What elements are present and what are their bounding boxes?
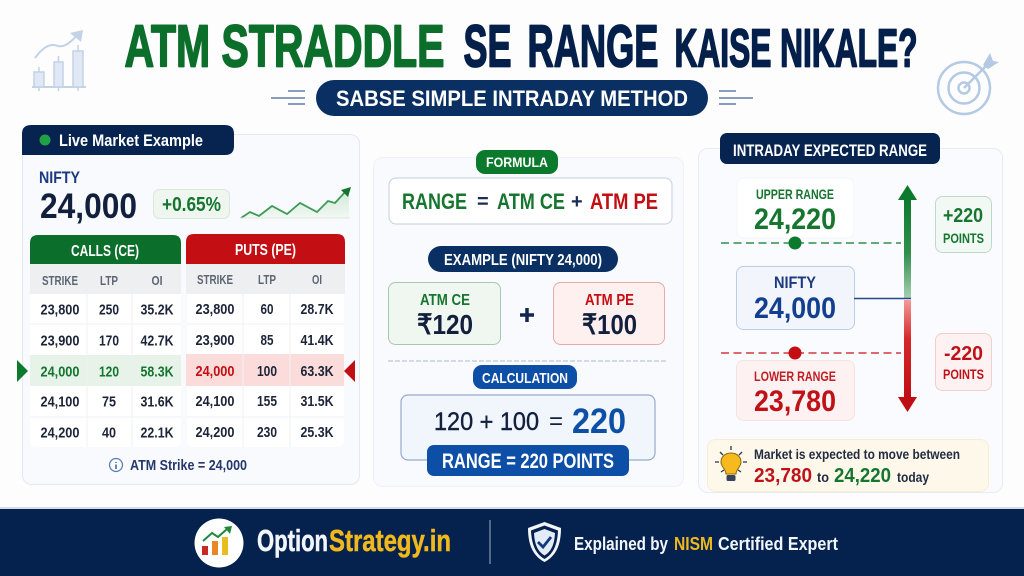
- callout: expected move: Market is expected to move between: [754, 446, 960, 462]
- header: live market example: Live Market Example: [59, 131, 203, 150]
- upper range level line: [721, 236, 901, 250]
- puts rows: 24,000: [196, 363, 234, 380]
- sparkline: [240, 187, 351, 218]
- calls rows: 40: [102, 424, 116, 442]
- formula pill: [476, 150, 558, 174]
- puts column headers: STRIKE: [197, 272, 233, 287]
- puts rows: 155: [257, 393, 277, 410]
- icon: candlestick growth chart: [32, 30, 86, 91]
- nifty card: 24,000: [754, 292, 836, 325]
- nifty card: NIFTY: [774, 273, 817, 292]
- range header: INTRADAY EXPECTED RANGE: [733, 141, 927, 160]
- footer bar: [0, 507, 1024, 576]
- marker: green ATM arrow: [17, 360, 28, 382]
- example pill: [428, 246, 618, 272]
- result pill: [427, 445, 629, 476]
- callout: expected move: to: [817, 469, 829, 485]
- ATM PE card: [554, 282, 664, 344]
- nifty value: 24,000: [40, 187, 137, 226]
- arrow: up green: [898, 185, 917, 298]
- calculation pill: CALCULATION: [482, 370, 568, 387]
- puts rows: 63.3K: [300, 363, 334, 380]
- title: RANGE: [528, 14, 658, 80]
- puts rows: 85: [260, 332, 274, 349]
- title: ATM STRADDLE: [124, 14, 444, 80]
- expert credit: Explained by: [574, 534, 668, 554]
- header: live market example: [22, 125, 234, 155]
- brand name: [257, 523, 451, 558]
- subtitle pill: SABSE SIMPLE INTRADAY METHOD: [336, 86, 688, 111]
- upper range card: UPPER RANGE: [756, 186, 834, 202]
- speed lines left: [271, 91, 305, 104]
- table: puts: [186, 234, 345, 447]
- panel: live market example: [17, 125, 360, 484]
- puts rows: 28.7K: [300, 301, 334, 318]
- calculation box: =: [549, 408, 563, 435]
- calls rows: 170: [99, 332, 119, 350]
- calculation pill: [473, 365, 577, 389]
- calls rows: 42.7K: [140, 332, 174, 350]
- lower range card: [736, 360, 854, 420]
- calculation box: 120 + 100: [434, 408, 539, 436]
- puts ATM highlight: [186, 354, 344, 386]
- puts rows: 23,900: [196, 332, 234, 349]
- formula pill: FORMULA: [486, 154, 548, 170]
- calls rows: 22.1K: [140, 424, 174, 442]
- -220 points badge: [936, 334, 992, 390]
- calls column headers: [30, 264, 181, 294]
- title: SE: [464, 14, 512, 80]
- puts rows: 24,100: [196, 393, 234, 410]
- upper range card: [737, 178, 854, 238]
- change badge: +0.65%: [162, 194, 221, 216]
- calls rows: 23,900: [40, 332, 80, 350]
- calls rows: 24,200: [40, 424, 80, 442]
- speed lines right: [719, 91, 753, 104]
- nifty card: [736, 266, 854, 330]
- +220 points badge: +220: [943, 205, 983, 227]
- expert credit: Certified Expert: [718, 534, 838, 554]
- callout: expected move: today: [897, 469, 929, 485]
- range header: [720, 133, 940, 164]
- calls rows: 35.2K: [140, 302, 174, 318]
- formula box: [389, 178, 672, 224]
- -220 points badge: -220: [944, 343, 983, 365]
- calls rows: 24,000: [40, 364, 80, 380]
- icon: shield check: [528, 522, 561, 562]
- subtitle pill: [316, 80, 708, 116]
- nifty label: NIFTY: [39, 168, 81, 187]
- puts rows: 23,800: [196, 301, 234, 318]
- lower range card: LOWER RANGE: [754, 368, 836, 384]
- panel: intraday expected range: [698, 133, 1002, 492]
- calls rows: 24,100: [40, 394, 80, 410]
- formula box: +: [571, 191, 583, 213]
- change badge: [154, 190, 230, 218]
- icon: logo: [194, 518, 244, 568]
- +220 points badge: POINTS: [943, 230, 984, 246]
- lower range card: 23,780: [754, 385, 836, 418]
- puts rows: 31.5K: [300, 393, 334, 410]
- ATM CE card: ATM CE: [420, 292, 470, 309]
- puts rows: 25.3K: [300, 424, 334, 441]
- formula box: ATM CE: [497, 189, 565, 214]
- icon: light bulb: [715, 446, 747, 481]
- calculation box: [401, 395, 655, 460]
- calls rows: 23,800: [40, 302, 80, 318]
- calculation box: 220: [572, 402, 626, 441]
- ATM strike note: ATM Strike = 24,000: [130, 458, 247, 474]
- calls rows: [40, 302, 174, 442]
- marker: red ATM arrow: [344, 360, 355, 382]
- ATM PE card: ATM PE: [585, 292, 634, 309]
- puts column headers: OI: [312, 272, 322, 287]
- puts column headers: LTP: [258, 272, 276, 287]
- calls rows: 75: [102, 394, 116, 410]
- arrow: down red: [898, 300, 917, 412]
- puts rows: 100: [257, 363, 277, 380]
- title: [124, 14, 918, 80]
- calls column headers: OI: [152, 273, 162, 288]
- puts header: [186, 234, 345, 264]
- table: calls: [30, 235, 181, 447]
- expert credit: NISM: [674, 534, 713, 554]
- upper range card: 24,220: [754, 203, 836, 236]
- ATM CE card: ₹120: [417, 309, 473, 340]
- brand name: Strategy.in: [329, 523, 451, 558]
- calls header: CALLS (CE): [71, 243, 139, 260]
- puts rows: [196, 301, 334, 441]
- puts column headers: [186, 264, 345, 294]
- formula box: =: [477, 191, 489, 213]
- panel: formula and calculation: [374, 150, 684, 486]
- plus sign: [520, 308, 534, 322]
- callout: expected move: 23,780: [754, 465, 812, 487]
- callout: expected move: 24,220: [834, 465, 891, 487]
- formula box: RANGE: [402, 189, 467, 214]
- example pill: EXAMPLE (NIFTY 24,000): [444, 252, 602, 269]
- calls rows: 31.6K: [140, 394, 174, 410]
- callout: expected move: [708, 440, 988, 492]
- puts rows: 60: [260, 301, 274, 318]
- calls header: [30, 235, 181, 264]
- calls rows: 250: [99, 302, 119, 318]
- ATM CE card: [388, 282, 500, 344]
- +220 points badge: [936, 196, 992, 252]
- calls column headers: LTP: [100, 273, 118, 288]
- formula box: ATM PE: [590, 189, 658, 214]
- puts rows: 230: [257, 424, 277, 441]
- lower range level line: [721, 346, 901, 360]
- brand name: Option: [257, 523, 328, 558]
- icon: target with arrow: [938, 53, 999, 114]
- calls ATM highlight: [30, 355, 181, 386]
- -220 points badge: POINTS: [943, 366, 984, 382]
- calls column headers: STRIKE: [42, 273, 78, 288]
- ATM PE card: ₹100: [582, 309, 637, 340]
- calls rows: 120: [99, 364, 119, 380]
- puts rows: 41.4K: [300, 332, 334, 349]
- result pill: RANGE = 220 POINTS: [442, 450, 614, 473]
- puts header: PUTS (PE): [235, 242, 296, 259]
- expert credit: [574, 534, 838, 554]
- puts rows: 24,200: [196, 424, 234, 441]
- calls rows: 58.3K: [140, 364, 174, 380]
